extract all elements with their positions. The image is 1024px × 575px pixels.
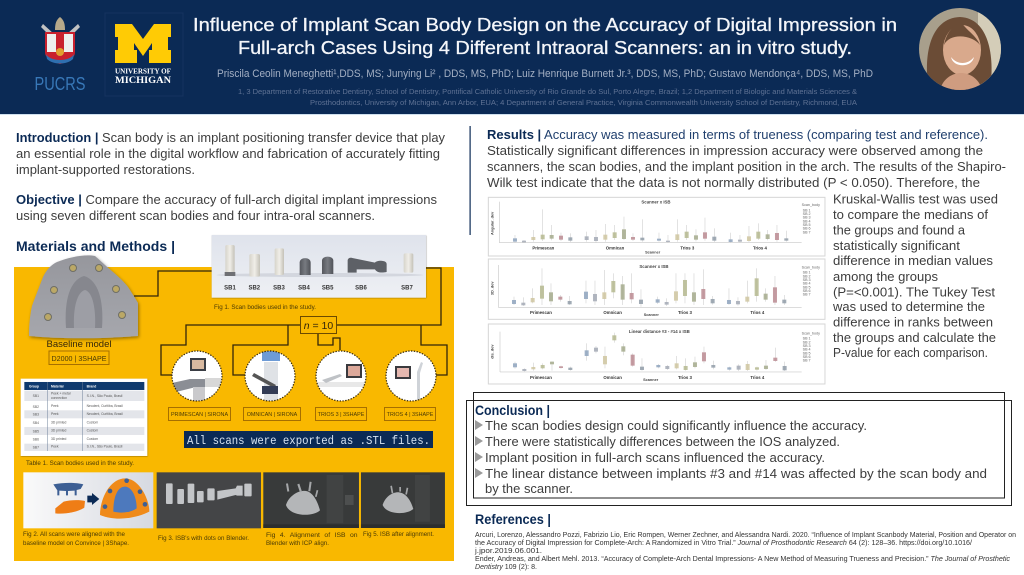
baseline model: [29, 255, 138, 338]
affiliations: [238, 87, 857, 107]
label: Trios 4 | 3Shape: [384, 408, 436, 420]
conclusion list: There were statistically differences between the IOS analyzed.: [485, 434, 840, 449]
text: references: j.jpor.2019.06.001.: [474, 546, 542, 555]
chart: 3D deviation by scanner and ISB: Primescan: [530, 310, 552, 315]
chart: angular deviation by scanner and ISB: Scanner x ISB: [641, 200, 671, 205]
chart: angular deviation by scanner and ISB: SB 5: [803, 223, 811, 227]
figure 1: scan bodies: SB2: [248, 285, 261, 291]
caption: figure 2: Fig 2. All scans were aligned with the: [23, 531, 125, 538]
table: scan bodies: 3D printed: [51, 420, 66, 424]
chart: linear distance #3 - #14 by ISB: SB 5: [803, 351, 811, 355]
logo: University of Michigan: MICHIGAN: [115, 75, 171, 86]
label: Trios 3 | 3Shape: [316, 408, 366, 420]
caption: figure 4: Fig 4. Alignment of ISB on: [266, 532, 358, 539]
text: introduction: Introduction | Scan body is an implant positioning transfer device that play: [16, 130, 445, 145]
chart: linear distance #3 - #14 by ISB: SB 7: [803, 359, 811, 363]
table: scan bodies: 3D printed: [51, 429, 66, 433]
chart: angular deviation by scanner and ISB: SB 2: [803, 212, 811, 216]
table: scan bodies: SB2: [33, 405, 39, 409]
chart: linear distance #3 - #14 by ISB: Primescan: [530, 375, 552, 380]
figure 1: scan bodies: SB6: [355, 285, 367, 291]
text: results: Statistically significant differences in impression accuracy were observed among the: [487, 143, 983, 158]
chart: angular deviation by scanner and ISB: Primescan: [532, 246, 555, 251]
chart: linear distance #3 - #14 by ISB: Trios 4: [750, 375, 765, 380]
text: references: Ender, Andreas, and Albert Mehl. 2013. “Accuracy of Complete-Arch Dental Impressions- A New Method of Measuring Trueness and Precision.” The Journal of Prosthetic: [475, 554, 1010, 563]
table: scan bodies: Material: [51, 384, 64, 388]
text: results: (P=<0.001). The Tukey Test: [833, 284, 995, 300]
table: scan bodies: Peek: [51, 404, 59, 408]
chart: angular deviation by scanner and ISB: SB 4: [803, 219, 811, 223]
chart: angular deviation by scanner and ISB: [488, 197, 825, 256]
text: references: the Accuracy of Digital Impression for Complete-Arch: A Randomized in Vitro Trial.” Journal of Prosthodontic Research 64 (2): 128–36. https://doi.org/10.1016/: [475, 538, 973, 547]
figure 1: scan bodies: [212, 235, 426, 298]
label: D2000 | 3SHAPE: [49, 351, 109, 364]
table: scan bodies: Peek: [51, 445, 59, 449]
text: objective: [16, 192, 437, 223]
chart: linear distance #3 - #14 by ISB: Scan_body: [802, 331, 820, 335]
text: results: P-value for each comparison.: [833, 345, 988, 360]
affiliations: Prosthodontics, University of Michigan, Ann Arbor, EUA; 4 Department of General Practice, Virginia Commonwealth University School of Dentistry, Richmond, EUA: [310, 98, 857, 107]
caption: figure 4: [266, 532, 358, 547]
scanner: Trios 3: [316, 351, 366, 401]
chart: linear distance #3 - #14 by ISB: Trios 3: [678, 375, 693, 380]
chart: 3D deviation by scanner and ISB: SB 1: [803, 271, 811, 275]
author photo: [919, 8, 1001, 90]
table: scan bodies: Neodent, Curitiba, Brasil: [87, 404, 123, 408]
caption: figure 2: baseline model on Convince | 3Shape.: [23, 540, 129, 547]
label: Trios 3 | 3Shape: TRIOS 3 | 3SHAPE: [318, 412, 365, 418]
chart: 3D deviation by scanner and ISB: Omnican: [603, 310, 622, 315]
label: Omnican | Sirona: OMNICAN | SIRONA: [247, 412, 298, 418]
label: Primescan | Sirona: PRIMESCAN | SIRONA: [171, 412, 228, 418]
caption: figure 5: Fig 5. ISB after alignment.: [363, 531, 434, 538]
table: scan bodies: Custom: [87, 420, 98, 424]
callout: STL export: All scans were exported as .STL files.: [187, 434, 430, 448]
chart: angular deviation by scanner and ISB: Scan_body: [802, 203, 820, 207]
table: scan bodies: Custom: [87, 429, 98, 433]
chart: 3D deviation by scanner and ISB: Scanner: [644, 313, 659, 317]
header banner: [0, 0, 1024, 115]
conclusion list: [485, 418, 987, 496]
connectors: [134, 268, 447, 375]
table: scan bodies: Group: [29, 384, 39, 388]
table: scan bodies: Peek: [51, 412, 59, 416]
chart: 3D deviation by scanner and ISB: 3D_dev: [490, 281, 494, 295]
text: results: among the groups: [833, 269, 938, 284]
bullet icons: [475, 420, 483, 478]
text: results: Results | Accuracy was measured in terms of trueness (comparing test and reference).: [487, 127, 988, 142]
chart: linear distance #3 - #14 by ISB: SB 6: [803, 355, 811, 359]
table: scan bodies: SB3: [33, 412, 39, 416]
table: scan bodies: SB7: [33, 445, 39, 449]
text: results: was used to determine the: [832, 299, 985, 314]
logo: University of Michigan: UNIVERSITY OF: [115, 66, 171, 76]
panel: conclusion: [466, 392, 1012, 506]
table: scan bodies: SB6: [33, 438, 39, 442]
label: Primescan | Sirona: [168, 408, 230, 420]
table: scan bodies: SB1: [33, 394, 39, 398]
text: references: [474, 530, 1016, 571]
text: objective: using seven different scan bodies and four intra-oral scanners.: [16, 208, 375, 223]
figure 1: scan bodies: SB3: [273, 285, 285, 291]
chart: linear distance #3 - #14 by ISB: SB 3: [803, 344, 811, 348]
chart: linear distance #3 - #14 by ISB: Linear distance #3 - #14 x ISB: [629, 329, 690, 334]
table: scan bodies: Neodent, Curitiba, Brasil: [87, 412, 123, 416]
chart: 3D deviation by scanner and ISB: SB 5: [803, 285, 811, 289]
chart: 3D deviation by scanner and ISB: Scanner x ISB: [639, 264, 669, 269]
conclusion list: The linear distance between implants #3 and #14 was affected by the scan body and: [485, 466, 987, 481]
text: results: scanners, the scan bodies, and the implant position in the arch. The results of the Shapiro-: [487, 159, 1006, 174]
chart: angular deviation by scanner and ISB: Angular_dev: [490, 211, 494, 235]
label: D2000 | 3SHAPE: D2000 | 3SHAPE: [52, 354, 106, 363]
caption: table 1: Table 1. Scan bodies used in the study.: [26, 460, 134, 467]
chart: 3D deviation by scanner and ISB: SB 7: [803, 293, 811, 297]
conclusion list: The scan bodies design could significantly influence the accuracy.: [485, 418, 867, 433]
chart: linear distance #3 - #14 by ISB: Omnican: [603, 375, 622, 380]
title: Full-arch Cases Using 4 Different Intraoral Scanners: an in vitro study.: [238, 37, 852, 58]
text: results: Wilk test indicate that the data is not normally distributed (P < 0.050). Therefore, the: [487, 175, 980, 190]
chart: 3D deviation by scanner and ISB: [488, 259, 825, 319]
text: references: Dentistry 109 (2): 8.: [475, 562, 537, 571]
figure 1: scan bodies: SB4: [298, 285, 310, 291]
table: scan bodies: Brand: [87, 384, 96, 388]
chart: 3D deviation by scanner and ISB: SB 4: [803, 282, 811, 286]
text: results: statistically significant: [833, 238, 960, 253]
caption: figure 1: Fig 1. Scan bodies used in the study.: [214, 304, 316, 311]
title: [193, 14, 897, 58]
text: objective: Objective | Compare the accuracy of full-arch digital implant impressions: [16, 192, 437, 207]
label: n = 10: n = 10: [304, 320, 333, 332]
logo: University of Michigan: [105, 13, 183, 96]
text: results: [487, 127, 1006, 360]
table: scan bodies: connection: [51, 396, 67, 400]
chart: angular deviation by scanner and ISB: SB 7: [803, 230, 811, 234]
table: scan bodies: Custom: [87, 437, 98, 441]
chart: angular deviation by scanner and ISB: SB 6: [803, 227, 811, 231]
logo: PUCRS: [34, 17, 86, 94]
title: Influence of Implant Scan Body Design on the Accuracy of Digital Impression in: [193, 14, 897, 35]
figure 1: scan bodies: SB1: [224, 285, 236, 291]
text: results: Kruskal-Wallis test was used: [833, 192, 998, 206]
chart: angular deviation by scanner and ISB: SB 1: [803, 208, 811, 212]
label: Trios 4 | 3Shape: TRIOS 4 | 3SHAPE: [387, 412, 434, 418]
chart: 3D deviation by scanner and ISB: Scan_body: [802, 266, 820, 270]
chart: angular deviation by scanner and ISB: Scanner: [645, 251, 661, 255]
chart: linear distance #3 - #14 by ISB: Scanner: [643, 378, 659, 382]
heading: references: References |: [475, 512, 551, 527]
authors: Priscila Ceolin Meneghetti¹,DDS, MS; Junying Li² , DDS, MS, PhD; Luiz Henrique Burnett Jr.³, DDS, MS, PhD; Gustavo Mendonça⁴, DDS, MS, PhD: [217, 68, 873, 80]
chart: linear distance #3 - #14 by ISB: SB 1: [803, 337, 811, 341]
chart: 3D deviation by scanner and ISB: Trios 3: [678, 310, 693, 315]
text: results: the groups and found a: [833, 222, 966, 238]
table: scan bodies: 3D printed: [51, 437, 66, 441]
scanner: Trios 4: [386, 351, 436, 402]
chart: 3D deviation by scanner and ISB: SB 6: [803, 289, 811, 293]
chart: linear distance #3 - #14 by ISB: [488, 324, 825, 384]
table: scan bodies: S.I.N., São Paulo, Brasil: [87, 445, 123, 449]
caption: figure 2: [23, 531, 129, 547]
label: n = 10: [300, 316, 336, 334]
table: scan bodies: S.I.N., São Paulo, Brasil: [87, 394, 123, 398]
table: scan bodies: Peek + metal: [51, 392, 71, 396]
figure 5: after alignment: [361, 472, 445, 528]
heading: materials and methods: Materials and Methods |: [16, 239, 175, 254]
text: results: to compare the medians of: [833, 207, 988, 222]
chart: linear distance #3 - #14 by ISB: SB 2: [803, 340, 811, 344]
chart: angular deviation by scanner and ISB: Trios 4: [753, 246, 768, 251]
panel: materials and methods: [14, 235, 454, 561]
chart: angular deviation by scanner and ISB: Trios 3: [680, 246, 695, 251]
scanner: Omnicam: [245, 351, 295, 402]
table: scan bodies: SB4: [33, 421, 39, 425]
text: introduction: [16, 130, 445, 177]
chart: linear distance #3 - #14 by ISB: SB 4: [803, 348, 811, 352]
chart: linear distance #3 - #14 by ISB: dis_dev: [490, 344, 494, 359]
table: scan bodies: [21, 379, 147, 456]
chart: 3D deviation by scanner and ISB: SB 3: [803, 278, 811, 282]
divider line: [470, 126, 471, 235]
conclusion list: Implant position in full-arch scans influenced the accuracy.: [485, 450, 825, 465]
figure 3: ISBs with dots: [157, 472, 261, 528]
chart: 3D deviation by scanner and ISB: Trios 4: [750, 310, 765, 315]
text: introduction: implant-supported restorations.: [16, 162, 195, 177]
text: results: the groups and calculate the: [833, 330, 996, 345]
figure 1: scan bodies: SB5: [322, 285, 334, 291]
baseline model label: Baseline model: [46, 339, 112, 350]
chart: angular deviation by scanner and ISB: SB 3: [803, 216, 811, 220]
label: Omnican | Sirona: [244, 408, 300, 420]
chart: 3D deviation by scanner and ISB: SB 2: [803, 274, 811, 278]
figure 4: ICP alignment: [263, 472, 359, 528]
figure 2: alignment in Convince: [23, 472, 153, 528]
caption: figure 4: Blender with ICP align.: [266, 540, 329, 547]
text: results: difference in median values: [833, 253, 993, 268]
figure 1: scan bodies: SB7: [401, 285, 413, 291]
table: scan bodies: SB5: [33, 429, 39, 433]
chart: angular deviation by scanner and ISB: Omnican: [606, 246, 625, 251]
caption: figure 3: Fig 3. ISB's with dots on Blender.: [158, 535, 249, 542]
text: results: difference in ranks between: [833, 314, 993, 330]
text: introduction: an essential role in the digital workflow and fabrication of accurately fitting: [16, 146, 440, 161]
logo: PUCRS: PUCRS: [34, 74, 86, 94]
conclusion list: by the scanner.: [485, 481, 573, 496]
scanner: Primescan: [172, 351, 222, 401]
heading: conclusion: Conclusion |: [475, 403, 550, 418]
affiliations: 1, 3 Department of Restorative Dentistry, School of Dentistry, Pontifical Catholic University of Rio Grande do Sul, Porto Alegre, Brazil; 1,2 Department of Biologic and Materials Sciences &: [238, 87, 857, 96]
